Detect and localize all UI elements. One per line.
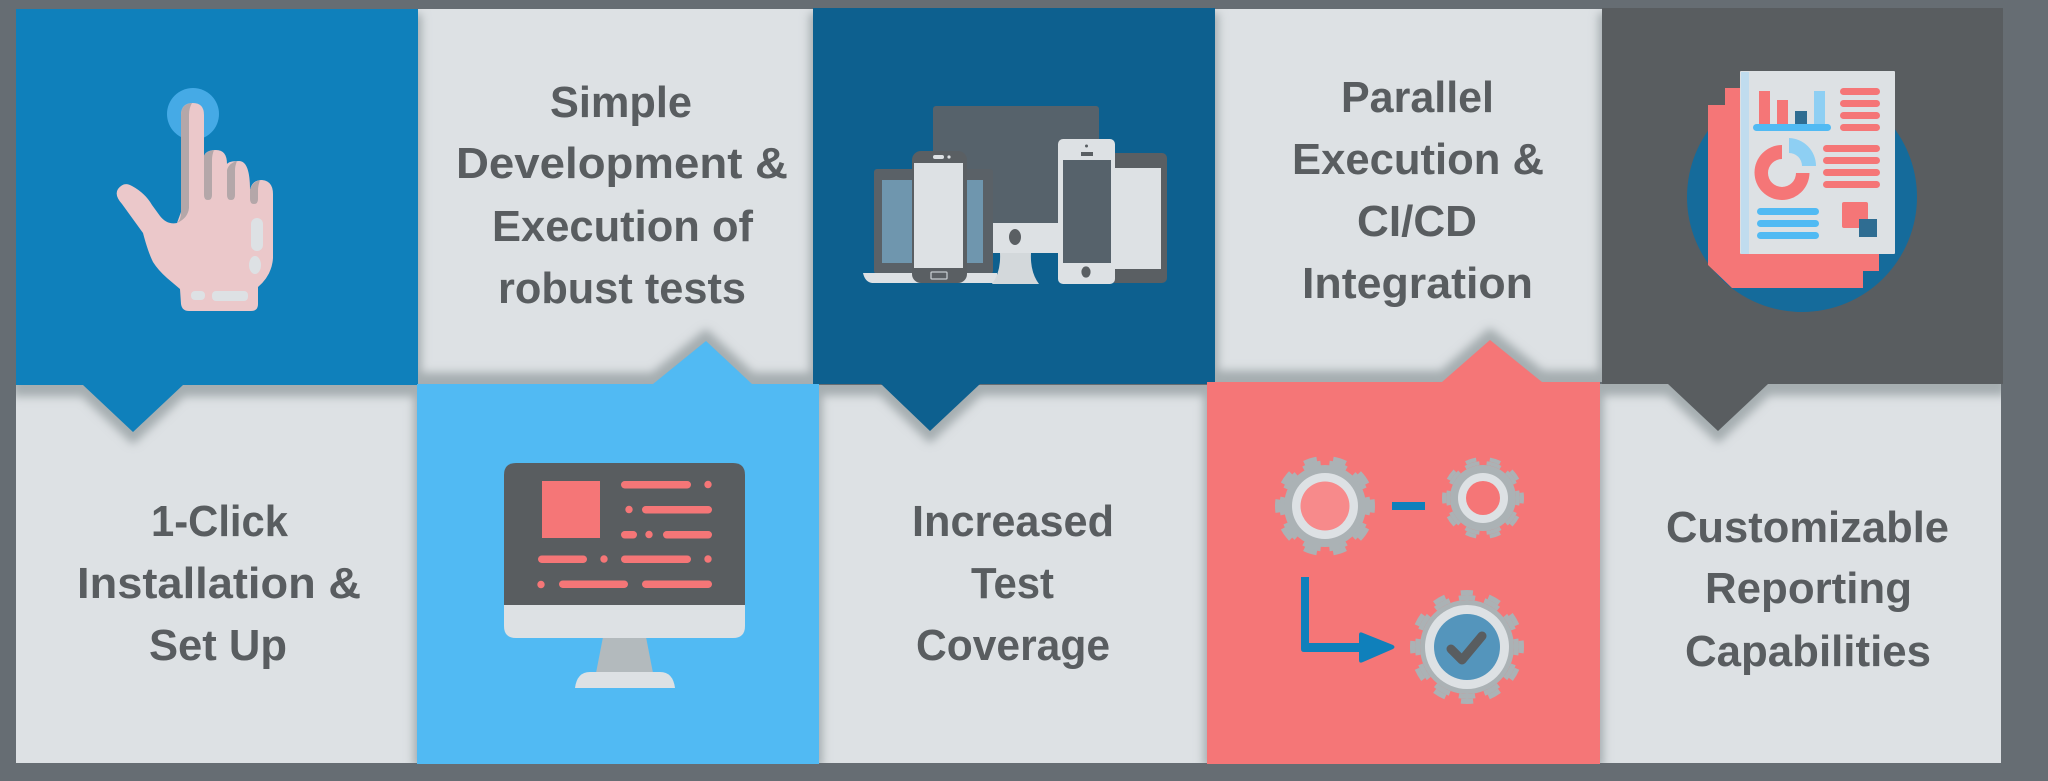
- heading: 1-Click Installation & Set Up: [77, 497, 361, 670]
- heading: Simple Development & Execution of robust tests: [456, 78, 788, 313]
- panel 1: one-click installation: [16, 9, 418, 670]
- heading: Parallel Execution & CI/CD Integration: [1292, 73, 1544, 308]
- panel 3 colour block: [813, 8, 1215, 431]
- panel 3: increased test coverage: [813, 8, 1215, 670]
- heading: Simple Development & Execution of robust tests: Simple: [550, 78, 692, 127]
- heading: 1-Click Installation & Set Up: Installation &: [77, 559, 361, 608]
- icon: gear two: [1444, 459, 1522, 537]
- icon: gear one: [1278, 458, 1372, 554]
- heading: Customizable Reporting Capabilities: [1666, 503, 1949, 676]
- heading: 1-Click Installation & Set Up: 1-Click: [151, 497, 288, 546]
- icon: dash connector: [1392, 502, 1425, 510]
- heading: 1-Click Installation & Set Up: Set Up: [149, 621, 287, 670]
- heading: Customizable Reporting Capabilities: Reporting: [1705, 564, 1912, 613]
- heading: Simple Development & Execution of robust tests: robust tests: [498, 264, 746, 313]
- panel 2 colour block: [417, 341, 819, 764]
- heading: Simple Development & Execution of robust tests: Execution of: [492, 202, 753, 251]
- heading: Increased Test Coverage: Increased: [912, 497, 1114, 546]
- icon: tapping hand: [117, 88, 273, 311]
- panel 5: customizable reporting: [1602, 8, 2003, 676]
- heading: Parallel Execution & CI/CD Integration: CI/CD: [1357, 197, 1477, 246]
- heading: Simple Development & Execution of robust tests: Development &: [456, 139, 788, 188]
- panel 1 colour block: [16, 9, 418, 432]
- icon: report document: [1687, 71, 1917, 312]
- heading: Parallel Execution & CI/CD Integration: Parallel: [1341, 73, 1494, 122]
- panel 4 colour block: [1207, 340, 1600, 764]
- icon: desktop monitor: [504, 463, 745, 688]
- heading: Parallel Execution & CI/CD Integration: Execution &: [1292, 135, 1544, 184]
- heading: Increased Test Coverage: Coverage: [916, 621, 1110, 670]
- heading: Increased Test Coverage: Test: [971, 559, 1054, 608]
- arrow: elbow arrow to gear: [1301, 577, 1394, 663]
- panel 5 colour block: [1602, 8, 2003, 431]
- panel 2: simple development: [417, 78, 819, 764]
- heading: Increased Test Coverage: [912, 497, 1114, 670]
- heading: Customizable Reporting Capabilities: Capabilities: [1685, 627, 1931, 676]
- icon: responsive devices: [863, 106, 1167, 284]
- icon: gear with check: [1412, 592, 1522, 702]
- panel 4: parallel execution: [1207, 73, 1600, 764]
- heading: Customizable Reporting Capabilities: Customizable: [1666, 503, 1949, 552]
- heading: Parallel Execution & CI/CD Integration: Integration: [1302, 259, 1533, 308]
